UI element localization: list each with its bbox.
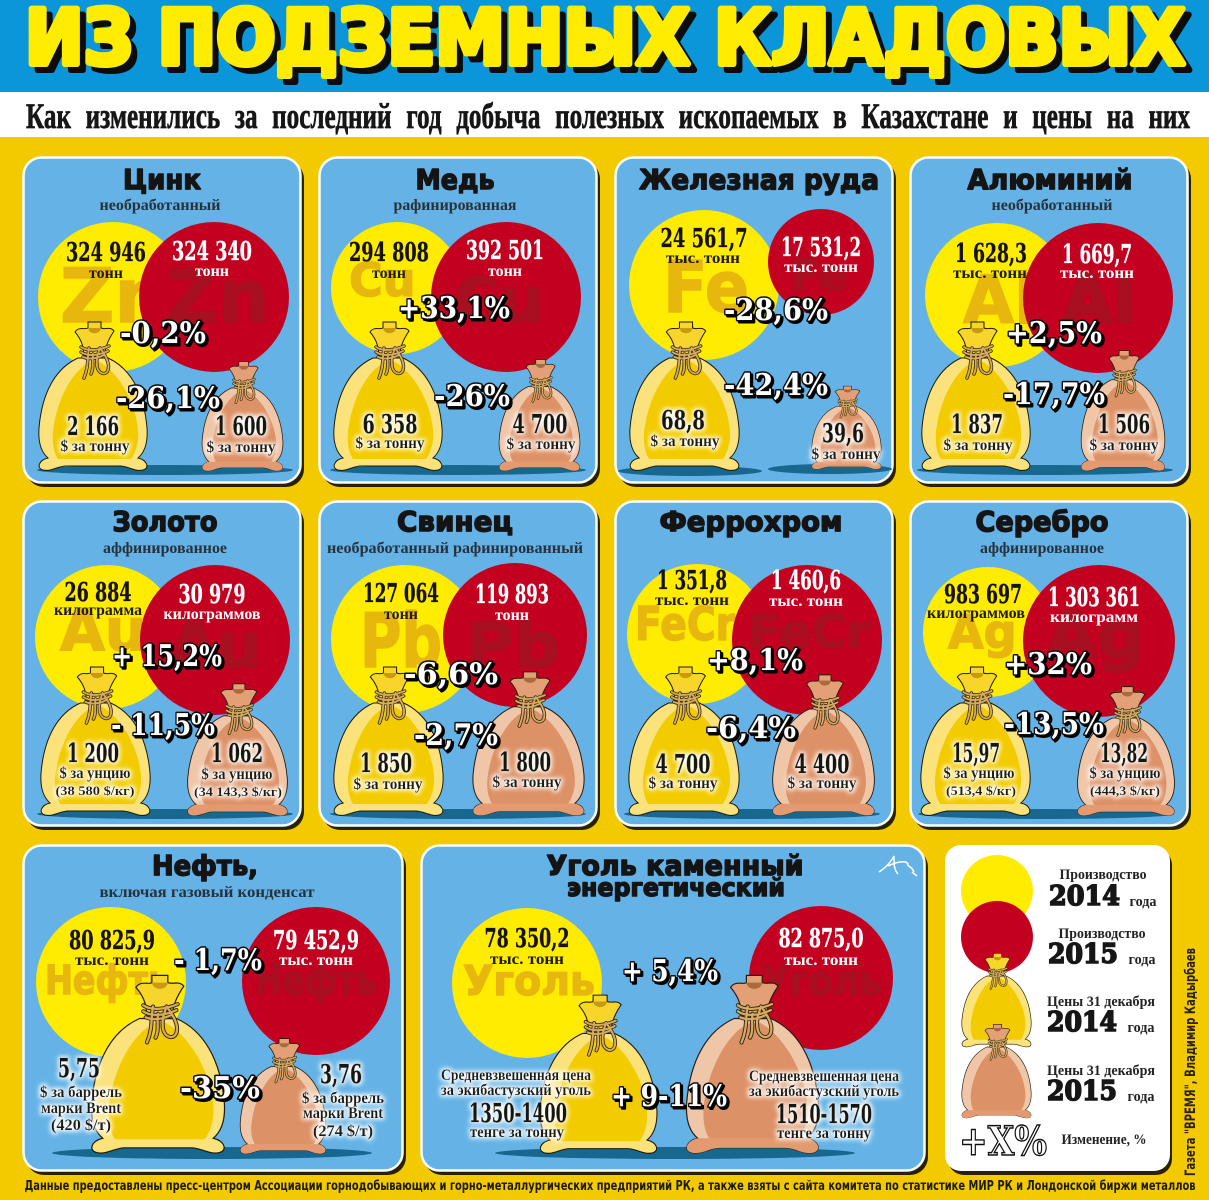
value 2015: 82 875,0 <box>778 924 864 954</box>
value 2015: тонн <box>495 607 529 624</box>
legend: price 2015: года <box>1128 1089 1155 1105</box>
bag: price 2014 <box>334 322 442 470</box>
circle: production 2015 <box>1023 565 1175 717</box>
price 2015 <box>302 1060 384 1140</box>
price 2015: $ за унцию <box>202 766 272 783</box>
value 2014 <box>927 580 1025 622</box>
price 2015: 1510-1570 <box>776 1100 872 1130</box>
legend: price 2014: года <box>1128 1020 1155 1036</box>
price 2015 <box>1090 410 1158 454</box>
panel: copper <box>320 158 600 487</box>
price 2014 <box>944 410 1012 454</box>
bag: price 2015 <box>1078 687 1174 816</box>
heading: gold: Золото <box>112 505 218 538</box>
legend: production 2015: Производство <box>1058 926 1146 942</box>
value 2014: килограммов <box>927 605 1025 622</box>
value 2014: 983 697 <box>944 580 1022 610</box>
price 2014: $ за тонну <box>60 438 130 455</box>
change price: -2,7% <box>414 718 498 753</box>
circle: production 2015 <box>749 906 893 1050</box>
circle: production 2014: Ag <box>948 605 1017 659</box>
value 2014: тонн <box>89 265 123 282</box>
circle: production 2015 <box>140 565 290 715</box>
ground shadow <box>330 465 586 475</box>
price 2015: $ за тонну <box>1090 437 1158 454</box>
value 2014: 1 351,8 <box>657 566 727 596</box>
value 2014: тыс. тонн <box>655 592 729 609</box>
title band <box>0 0 1209 137</box>
bag: price 2015 <box>499 360 580 471</box>
ground shadow <box>330 809 586 819</box>
price 2015 <box>492 748 562 791</box>
ground shadow <box>624 809 880 819</box>
price 2014: тенге за тонну <box>470 1124 564 1141</box>
ground shadow <box>52 1147 372 1159</box>
circle: production 2014: Pb <box>360 597 442 685</box>
heading: silver: Серебро <box>976 505 1108 538</box>
value 2014: тонн <box>372 265 406 282</box>
circle: production 2014 <box>923 567 1053 697</box>
bag: price 2014 <box>630 322 739 470</box>
ground shadow <box>917 465 1173 475</box>
value 2015: 392 501 <box>466 236 544 266</box>
circle: production 2014: Al <box>963 262 1037 339</box>
value 2014: тонн <box>384 606 418 623</box>
value 2015: 1 303 361 <box>1048 583 1140 613</box>
subheading: рафинированная <box>394 197 517 214</box>
heading: oil: Нефть, <box>152 849 258 882</box>
change price: -6,4% <box>706 711 796 746</box>
change production: -0,2% <box>120 316 206 351</box>
value 2015: 1 460,6 <box>771 566 841 596</box>
change price: -17,7% <box>1003 377 1105 412</box>
circle: production 2014 <box>36 907 186 1057</box>
price 2014 <box>650 406 720 450</box>
circle: production 2014: Нефть <box>45 958 169 1004</box>
price 2014: $ за тонну <box>356 435 424 452</box>
heading: ferrochrome: Феррохром <box>660 505 842 538</box>
price 2015: (444,3 $/кг) <box>1090 783 1160 798</box>
bag: price 2015 <box>473 672 584 815</box>
price 2014: 1 850 <box>360 749 412 779</box>
price 2015: 1 506 <box>1098 410 1150 440</box>
circle: production 2015: Ag <box>1046 597 1144 674</box>
price 2015: 1 600 <box>215 412 267 442</box>
price 2015: Средневзвешенная цена <box>749 1068 899 1085</box>
value 2014 <box>655 566 729 609</box>
legend: price 2014 <box>962 953 1155 1047</box>
value 2015 <box>164 580 261 623</box>
value 2014: 1 628,3 <box>955 239 1027 269</box>
value 2015: килограмм <box>1050 609 1138 626</box>
circle: production 2015: Уголь <box>762 957 882 1005</box>
price 2015 <box>194 739 282 799</box>
legend: production 2015: 2015 <box>1048 939 1118 970</box>
value 2014: 294 808 <box>349 238 429 268</box>
circle: production 2015: Нефть <box>255 958 377 1004</box>
price 2014: за экибастузский уголь <box>441 1082 591 1099</box>
circle: production 2015 <box>732 565 882 715</box>
change price: -26% <box>434 379 510 414</box>
price 2014 <box>60 412 130 455</box>
credit: Газета "ВРЕМЯ", Владимир Кадырбаев <box>1183 948 1199 1176</box>
circle: production 2015 <box>443 563 587 707</box>
value 2015: тыс. тонн <box>279 952 353 969</box>
change production: +8,1% <box>707 643 803 678</box>
price 2015: (274 $/т) <box>313 1123 373 1140</box>
value 2014: килограмма <box>54 602 142 619</box>
panel: silver <box>910 502 1191 830</box>
heading: copper: Медь <box>416 163 494 196</box>
price 2015: $ за тонну <box>206 439 276 456</box>
heading: coal <box>546 849 804 902</box>
legend: production 2014 <box>961 855 1157 927</box>
panel: legend <box>945 845 1172 1175</box>
value 2014 <box>69 926 155 969</box>
value 2014: 127 064 <box>363 579 439 609</box>
price 2014: $ за тонну <box>354 776 422 793</box>
price 2015: $ за унцию <box>1090 765 1160 782</box>
circle: production 2014 <box>38 222 188 372</box>
value 2015: тыс. тонн <box>784 952 858 969</box>
circle: production 2014 <box>627 564 767 704</box>
circle: production 2014: Cu <box>349 253 416 307</box>
price 2014: 4 700 <box>656 750 710 780</box>
heading: lead: Свинец <box>397 505 513 538</box>
bag: price 2015 <box>240 1039 326 1154</box>
value 2014 <box>363 579 439 623</box>
bag: price 2014 <box>334 667 443 815</box>
circle: production 2015: Pb <box>467 609 560 682</box>
price 2014: $ за унцию <box>944 765 1014 782</box>
value 2015 <box>769 566 843 610</box>
price 2015: (34 143,3 $/кг) <box>194 784 282 799</box>
heading: iron ore: Железная руда <box>639 163 879 196</box>
bag: price 2015 <box>1081 351 1165 471</box>
price 2014 <box>441 1067 591 1141</box>
value 2015: 79 452,9 <box>273 926 359 956</box>
legend: production 2015: года <box>1128 952 1156 968</box>
legend: price 2015: 2015 <box>1047 1076 1117 1107</box>
price 2014: 5,75 <box>58 1054 100 1084</box>
bag: price 2015 <box>686 975 819 1153</box>
bag: price 2014 <box>922 322 1030 470</box>
change production: +33,1% <box>398 291 510 326</box>
value 2014 <box>660 224 748 267</box>
heading: aluminium: Алюминий <box>968 163 1132 196</box>
price 2015: 1 062 <box>211 739 263 769</box>
heading: coal: Уголь каменный <box>546 849 804 882</box>
price 2015 <box>506 410 576 453</box>
legend: change: +X% <box>959 1118 1047 1165</box>
bag: price 2014 <box>91 975 225 1153</box>
value 2015: 30 979 <box>178 580 246 610</box>
value 2015: килограммов <box>164 606 261 623</box>
subheading: необработанный рафинированный <box>327 540 583 557</box>
bag: price 2014 <box>540 995 657 1153</box>
price 2014: 15,97 <box>952 739 1000 769</box>
price 2015: 3,76 <box>320 1060 362 1090</box>
value 2015: тонн <box>195 263 229 280</box>
legend: production 2014: 2014 <box>1049 881 1120 912</box>
value 2015 <box>475 580 549 624</box>
price 2015 <box>812 419 880 463</box>
price 2014 <box>648 750 718 792</box>
price 2014: (513,4 $/кг) <box>946 783 1016 798</box>
heading: zinc: Цинк <box>123 163 201 196</box>
subheading: аффинированное <box>103 540 227 557</box>
value 2015 <box>273 926 359 969</box>
value 2014: 324 946 <box>66 238 146 268</box>
value 2015: 324 340 <box>172 237 252 267</box>
legend: change: Изменение, % <box>1062 1132 1146 1148</box>
price 2014 <box>944 739 1016 798</box>
price 2014: 2 166 <box>67 412 119 442</box>
bag: price 2014 <box>41 667 150 815</box>
bag: price 2015 <box>773 675 874 815</box>
value 2014 <box>349 238 429 282</box>
legend: price 2014: 2014 <box>1047 1007 1117 1038</box>
price 2015: 13,82 <box>1100 739 1148 769</box>
bag: price 2014 <box>629 667 739 815</box>
price 2014 <box>40 1054 122 1134</box>
price 2015: $ за тонну <box>506 436 576 453</box>
panel: oil <box>24 846 406 1175</box>
price 2014: $ за тонну <box>648 775 718 792</box>
value 2015 <box>466 236 544 280</box>
value 2015: тонн <box>488 263 522 280</box>
circle: production 2014: FeCr <box>635 597 735 651</box>
panel: coal <box>422 846 928 1175</box>
circle: production 2014: Au <box>60 596 146 664</box>
value 2014: тыс. тонн <box>75 952 149 969</box>
price 2014: 68,8 <box>661 406 705 436</box>
change production: + 15,2% <box>112 639 222 674</box>
circle: production 2014: Fe <box>663 246 749 329</box>
value 2014: 78 350,2 <box>484 924 570 954</box>
subheading: аффинированное <box>980 540 1104 557</box>
value 2014 <box>484 924 570 968</box>
price 2015: 39,6 <box>822 419 864 449</box>
change production: + 5,4% <box>622 954 718 989</box>
subheading: необработанный <box>100 197 220 214</box>
price 2015: 4 700 <box>512 410 568 440</box>
panel: ferrochrome <box>616 502 896 830</box>
change price: -42,4% <box>724 368 828 403</box>
legend: price 2015 <box>962 1024 1155 1118</box>
circle: production 2014 <box>629 210 779 360</box>
legend: production 2015 <box>961 901 1156 973</box>
legend: production 2014: Производство <box>1060 867 1146 883</box>
price 2014: 1 200 <box>67 739 119 769</box>
value 2014: 26 884 <box>64 578 132 608</box>
circle: production 2014 <box>925 223 1069 367</box>
price 2014: Средневзвешенная цена <box>441 1067 591 1084</box>
circle: production 2014: Уголь <box>463 957 595 1005</box>
change production: -6,6% <box>404 657 498 692</box>
ground shadow <box>37 465 293 475</box>
value 2014: тыс. тонн <box>490 951 564 968</box>
circle: production 2015: Al <box>1062 262 1136 339</box>
value 2015: 119 893 <box>475 580 549 610</box>
circle: production 2015 <box>768 209 874 315</box>
subheading: включая газовый конденсат <box>100 884 315 901</box>
value 2015: тыс. тонн <box>1060 265 1134 282</box>
price 2015: 1 800 <box>499 748 551 778</box>
change price: - 11,5% <box>111 708 215 743</box>
bag: price 2015 <box>202 361 283 471</box>
value 2014: тыс. тонн <box>953 265 1027 282</box>
change production: +32% <box>1004 647 1092 682</box>
price 2015: $ за тонну <box>492 774 562 791</box>
price 2015: за экибастузский уголь <box>749 1083 899 1100</box>
price 2014: марки Brent <box>41 1100 122 1117</box>
circle: production 2015: Cu <box>454 264 544 337</box>
change price: + 9-11% <box>611 1079 727 1114</box>
change production: -28,6% <box>724 293 828 328</box>
value 2015 <box>781 233 861 276</box>
circle: production 2015: Fe <box>790 250 848 301</box>
price 2014: 1 837 <box>951 410 1003 440</box>
price 2014 <box>56 739 134 798</box>
panel: aluminium <box>910 158 1191 487</box>
value 2015: 17 531,2 <box>781 233 861 263</box>
panel: lead <box>320 502 600 830</box>
price 2015: $ за баррель <box>302 1090 384 1107</box>
heading: coal: энергетический <box>567 873 785 902</box>
legend: price 2014: Цены 31 декабря <box>1047 994 1155 1010</box>
price 2015: тенге за тонну <box>777 1125 871 1142</box>
value 2015: тыс. тонн <box>784 259 858 276</box>
value 2014: тыс. тонн <box>666 250 740 267</box>
circle: production 2015: FeCr <box>748 605 870 659</box>
ground shadow <box>918 809 1174 819</box>
price 2014: $ за тонну <box>944 437 1012 454</box>
value 2015 <box>1060 240 1134 282</box>
change price: -26,1% <box>116 381 220 416</box>
change price: -13,5% <box>1004 707 1104 742</box>
bag: price 2015 <box>812 386 881 469</box>
artist signature <box>879 856 917 876</box>
price 2015 <box>1090 739 1160 798</box>
circle: production 2015 <box>431 222 581 372</box>
price 2015 <box>206 412 276 456</box>
price 2015 <box>749 1068 899 1142</box>
price 2014: 6 358 <box>362 410 418 440</box>
circle: production 2015 <box>242 907 390 1055</box>
ground shadow <box>495 1147 855 1159</box>
price 2015: $ за тонну <box>812 446 880 463</box>
ground shadow <box>618 464 892 476</box>
value 2014: 24 561,7 <box>660 224 748 254</box>
value 2015 <box>172 237 252 280</box>
circle: production 2014 <box>331 222 463 354</box>
value 2014 <box>953 239 1027 282</box>
value 2015 <box>778 924 864 969</box>
circle: production 2015: Zn <box>166 255 269 339</box>
price 2014: $ за тонну <box>650 433 720 450</box>
circle: production 2014: Zn <box>60 252 168 340</box>
change production: - 1,7% <box>174 943 262 978</box>
change production: +2,5% <box>1006 316 1102 351</box>
bag: price 2015 <box>188 684 287 816</box>
panel: gold <box>24 502 304 830</box>
circle: production 2015 <box>139 222 289 372</box>
price 2015: марки Brent <box>303 1105 384 1122</box>
change price: -35% <box>180 1071 260 1106</box>
value 2014 <box>54 578 142 619</box>
value 2015: 1 669,7 <box>1062 240 1132 270</box>
price 2014: (38 580 $/кг) <box>56 783 134 798</box>
bag: price 2014 <box>921 667 1030 815</box>
subheading: необработанный <box>992 197 1112 214</box>
price 2015: $ за тонну <box>788 775 856 792</box>
legend: change <box>959 1118 1146 1165</box>
price 2014 <box>356 410 424 452</box>
value 2015 <box>1048 583 1140 626</box>
price 2014 <box>354 749 422 793</box>
value 2015: тыс. тонн <box>769 593 843 610</box>
price 2014: $ за баррель <box>40 1084 122 1101</box>
value 2014: 80 825,9 <box>69 926 155 956</box>
price 2015 <box>788 750 856 792</box>
circle: production 2014 <box>35 565 179 709</box>
circle: production 2014 <box>452 908 602 1058</box>
circle: production 2015: Au <box>170 609 261 682</box>
panel: zinc <box>24 158 304 487</box>
ground shadow <box>37 809 293 819</box>
circle: production 2014 <box>331 565 479 713</box>
price 2014: $ за унцию <box>60 765 130 782</box>
bag: price 2014 <box>39 322 147 470</box>
legend: price 2015: Цены 31 декабря <box>1047 1063 1155 1079</box>
panel: iron ore <box>616 158 896 487</box>
circle: production 2015 <box>1023 223 1173 373</box>
price 2014: 1350-1400 <box>469 1099 567 1129</box>
price 2014: (420 $/т) <box>51 1117 111 1134</box>
legend: production 2014: года <box>1130 894 1157 910</box>
price 2015: 4 400 <box>794 750 850 780</box>
value 2014 <box>66 238 146 282</box>
